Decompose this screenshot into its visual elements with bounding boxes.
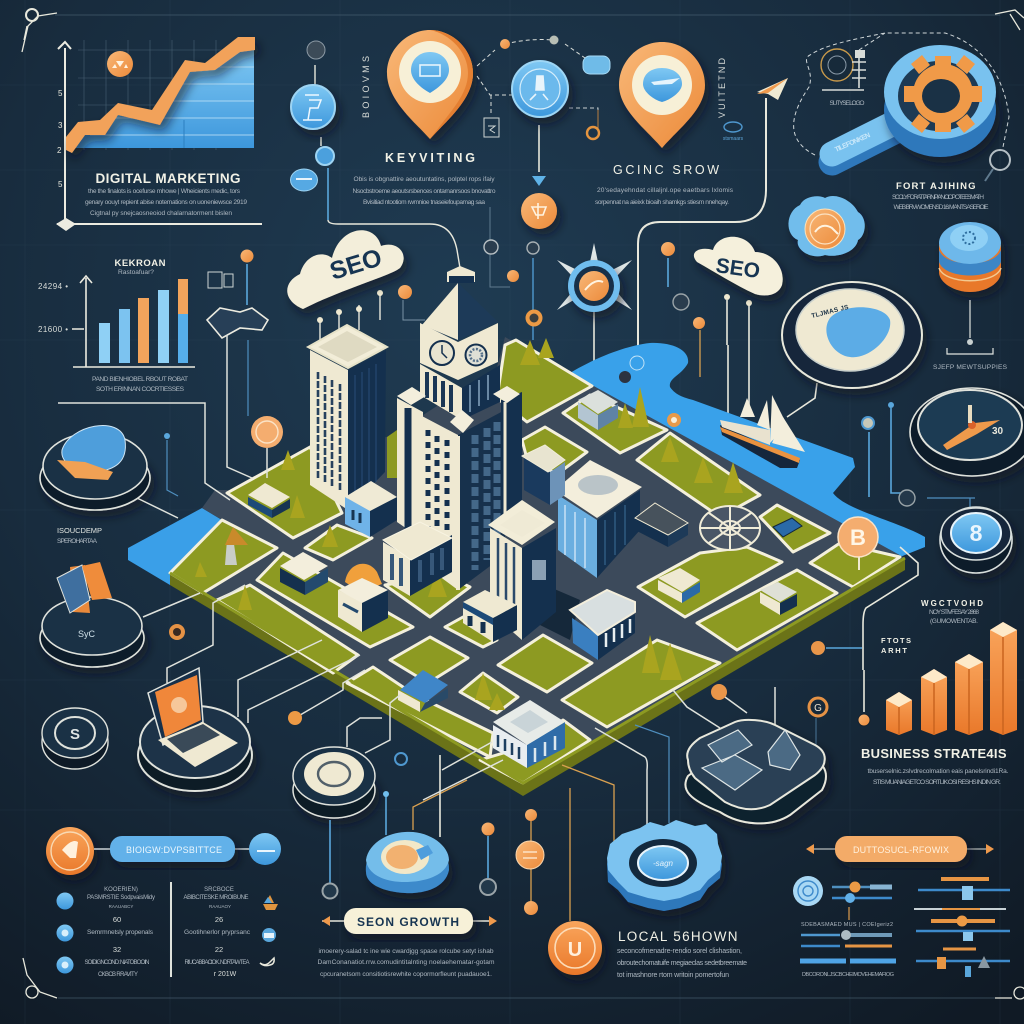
arrow: paper plane with route: [638, 78, 788, 363]
building: small blue cube: [345, 481, 397, 537]
badge B with line: B: [850, 525, 866, 550]
small ring: [169, 624, 185, 640]
line chart: 5: [58, 180, 63, 189]
building: low annex: [383, 522, 452, 596]
plate: map lens: TLJMAS JS: [811, 304, 850, 320]
body text seon growth: imoerery-salad tc ine wie cwardjgg spase rolcube setyt ishab: [318, 948, 494, 955]
pin: gcinc srow: [619, 42, 705, 148]
plate: map lens: [782, 282, 922, 417]
subheading: Rastoafuar?: [118, 269, 154, 276]
node: blue circle and arrow: [512, 56, 610, 340]
body text: STIS MUANIAGETCO SORTLIK:OSI RESHS INDIN GR.: [873, 779, 1001, 786]
pin: keyviting: [387, 30, 473, 139]
caption: SOTH ERINNAN COCRTIESSES: [96, 386, 185, 393]
cloud: SEO left: SEO: [327, 244, 385, 286]
small icon under vertical label: [723, 122, 744, 142]
pin orange left: [164, 416, 283, 448]
magnifier with gear: [794, 33, 1010, 181]
small label: SUTYSE LOGO: [830, 100, 864, 107]
right column: ABIBCITESKE MROIBUNE: [184, 895, 248, 901]
left figure 60: 60: [113, 915, 121, 924]
left row 3: CKBCB RRAVITY: [98, 972, 138, 978]
label: sjefp: SJEFP MEWTSUPPIES: [933, 364, 1008, 371]
right column: SRCBOCE: [204, 887, 234, 893]
tablet stack: [40, 562, 144, 667]
disc S: [42, 708, 108, 769]
pill: BIOIGW:DVPSBITTCE: [126, 845, 222, 855]
icon: keyword connector nodes: [290, 41, 460, 268]
label sperohartaa: SPEROHARTAA: [57, 538, 98, 545]
gauge: [910, 388, 1024, 476]
left row 2: Semrmnetsly propenals: [87, 929, 154, 936]
building: small left block: [280, 552, 328, 595]
left column: KOOERIEN): [104, 887, 138, 893]
vertical label left: BOIOVMS: [361, 56, 371, 118]
disc S: S: [70, 726, 80, 743]
line chart: 3: [58, 121, 63, 130]
main body: [420, 415, 458, 590]
icon: gold emblem and ladder: [821, 49, 866, 90]
bar label: FTOTS: [881, 636, 911, 645]
axis labels: 24294 •: [38, 282, 68, 291]
panel: business strategy: [861, 599, 1017, 786]
line chart: 2: [57, 146, 62, 155]
pill: [110, 836, 235, 862]
panel: bar chart kekroan: [38, 258, 195, 393]
heading local: LOCAL 56HOWN: [618, 929, 738, 944]
target icon: [793, 876, 823, 906]
body text: Cigtnal py snejcaosneoiod chalarnatorment bislen: [90, 210, 232, 217]
right column: RAAUAOY: [209, 904, 231, 909]
icon: small document and map: [207, 250, 268, 338]
left column: PASMRSTIE SodpvaisMidy: [87, 895, 155, 901]
connector: [94, 848, 252, 850]
body text seon growth: cpcuranetsom consitiotisrewhite copormorfleunt puadauoe1.: [320, 971, 492, 978]
gear: local: -sagn: [653, 859, 674, 868]
label isoucdemp: ISOUCDEMP: [57, 526, 102, 535]
badge B with line: [809, 517, 918, 760]
heading fort ajihing: FORT AJIHING: [896, 181, 976, 192]
line chart: [56, 37, 262, 231]
heading: KEKROAN: [114, 258, 166, 269]
left column: RAAUABCY: [109, 904, 133, 909]
blue pin connectors left: [167, 340, 248, 496]
orange pill: [806, 836, 994, 862]
heading gcinc srow: GCINC SROW: [613, 163, 719, 177]
body local: seconcofmenadre-rendio sorel clishastion,: [617, 948, 742, 955]
small route nodes: [661, 242, 705, 377]
building: tall tower left: [308, 325, 387, 510]
gear: [904, 55, 982, 133]
wings: [397, 398, 423, 540]
coin 8: [940, 507, 1012, 573]
right figure 26: 26: [215, 915, 223, 924]
axis label low: 21600 •: [38, 325, 68, 334]
body text seon growth: DamConanatiot.rrw.comudintitalnting noelaehematar-gotam: [318, 959, 495, 966]
left row 3: SOIDIGNCOND: NIATOBOOIN: [84, 960, 150, 966]
land side wall: [170, 558, 905, 796]
buildings: [195, 266, 805, 768]
coin 8: 8: [970, 520, 983, 546]
bar label: ARHT: [881, 646, 907, 655]
left figure 32: 32: [113, 945, 121, 954]
connector lines left: [58, 335, 503, 800]
building: house: [398, 670, 448, 712]
side copy: (GUMOWENTAB.: [930, 618, 978, 625]
panel: duttosucl framework: [793, 836, 1010, 978]
building: front glass block: [570, 590, 635, 660]
tower shaft: [420, 364, 462, 420]
building: rose wheel: [700, 506, 760, 550]
body text fort ajihing: SCOLY FORATTARN PIAN CIOP OTEESMATH: [892, 194, 984, 201]
corner ornament top left: [22, 9, 57, 52]
panel: program comparison: [46, 827, 281, 978]
heading keyviting: KEYVITING: [385, 151, 475, 165]
panel: digital marketing: [56, 37, 262, 231]
trees: [195, 338, 743, 710]
body text: genary oouyt repient abise notemations on uoneniewsce 2919: [85, 199, 247, 206]
cake dial: seon: [322, 755, 496, 898]
spire: [447, 266, 475, 282]
orange 3d bars: [886, 622, 1017, 735]
building: rear block: [522, 445, 565, 505]
body text fort ajihing: WEB BRVWOMENSD 16: MANTS ASEROIE: [894, 204, 989, 211]
water left: [128, 508, 222, 585]
water right: [570, 343, 925, 557]
right side label: WGCTVOHD: [921, 599, 983, 608]
orange medal: U: [568, 939, 582, 961]
side copy: NOY STIVFESAY 2868: [929, 609, 979, 616]
caption: PAND BIENHIOBEL RBOUT ROBAT: [92, 376, 188, 383]
building: bank: [463, 590, 517, 642]
line chart: 5: [58, 89, 63, 98]
road surface: [170, 337, 905, 783]
body local: tot imashnore rtom writoin pomertofun: [617, 972, 729, 979]
right row 3: r 201W: [214, 971, 237, 978]
right figure 22: 22: [215, 945, 223, 954]
gauge: 30: [992, 426, 1004, 437]
plate: isometric map: [685, 720, 826, 823]
cloud: SEO right: [694, 237, 783, 413]
search disc and small nodes: [288, 711, 407, 818]
building: glass block: [555, 460, 642, 578]
body text: tbuserselnic.zslvdrecolmation eais panelsrindi1Ra.: [868, 768, 1009, 775]
route nodes centre bottom: [516, 765, 614, 921]
body text: the the finalots is ocefurse mhowe | Wheicients medic, tors: [88, 188, 241, 195]
building: glass top rear: [578, 390, 618, 430]
heading: BUSINESS STRATE4IS: [861, 746, 1007, 761]
slider knobs: [841, 882, 990, 977]
body text keyviting: Nsocbstroeme aeoutsrsbences ontarnanrsoos bnovattro: [352, 188, 496, 195]
body text keyviting: Obis is obgnattire aeoutuntatins, polptel rops ifaiy: [354, 176, 495, 183]
orange medal: [548, 921, 602, 975]
icon bullets: [56, 892, 74, 974]
node pins by gauge: [862, 402, 975, 510]
icon: layered disc stack: [939, 222, 1001, 292]
divider: [170, 882, 172, 977]
pill: seon growth: [322, 908, 497, 934]
corner ornament bottom right: [995, 987, 1024, 999]
land plate: city base: [128, 337, 925, 796]
small magnifier: [985, 150, 1010, 181]
clock faces: [420, 323, 458, 380]
icon: blue flower cloud: [788, 196, 865, 256]
corner ornament bottom left: [23, 958, 57, 998]
building: rear left lodge: [225, 483, 290, 565]
buoy: [619, 356, 681, 427]
icons right: [260, 895, 278, 966]
orange pill: DUTTOSUCL-RFOWIX: [853, 845, 949, 855]
body text gcinc: 20'sedayehndat cillaljnl.ope eaetbars Ixlomis: [597, 187, 734, 194]
building: right small: [635, 503, 802, 615]
bars: [72, 276, 195, 367]
corner ornament top right: [995, 10, 1024, 30]
slider labels: SDEBASMAED MUS | COEIgeriz2: [801, 922, 893, 928]
olive blocks: [170, 340, 900, 783]
badge B with line: G: [814, 703, 822, 714]
icon: sun target: [557, 243, 632, 377]
laptop disc: [138, 668, 252, 791]
body local: obroutechomatuife megiaeclas sedetbreemate: [617, 960, 747, 967]
ship: [720, 395, 805, 468]
label: sjefp: [933, 300, 1008, 371]
right row 3: RIUCABBACIOK. NDRTAWTEA: [184, 960, 250, 966]
gear: local: [595, 684, 775, 911]
building: civic bottom: [493, 700, 565, 768]
body text keyviting: Bvisitiad ntootiom rwmnioe tnaseiefoupamag saa: [363, 199, 485, 206]
right row 2: Gootihnerlor pryprsanc: [184, 929, 251, 936]
small icon under vertical label: stsmaars: [723, 136, 744, 142]
sliders: [800, 879, 1010, 961]
cloud: SEO left: [287, 230, 425, 345]
slider caption: DBCORONLJSCBCHEIMOVEHEMAFIOG: [802, 972, 894, 978]
cloud: SEO right: SEO: [714, 254, 761, 283]
vertical label right: VUITETND: [717, 58, 727, 118]
heading: DIGITAL MARKETING: [96, 171, 240, 186]
building: clock tower: [397, 266, 522, 590]
dish: world map left: [40, 426, 150, 510]
pill: seon growth: SEON GROWTH: [357, 915, 459, 929]
blue node: [249, 833, 281, 865]
body text gcinc: sorpennat na aieixk bioaih shamkgs stiesm nnehqay.: [595, 199, 729, 206]
building: shop with orange tree: [338, 564, 388, 632]
building: mid tower: [488, 500, 556, 640]
icon orange seal: [46, 827, 94, 875]
tablet stack: SyC: [78, 629, 96, 639]
dashed connector keyword to pin: [477, 36, 585, 287]
magnifier with gear: TILEFONKEN: [834, 132, 872, 154]
